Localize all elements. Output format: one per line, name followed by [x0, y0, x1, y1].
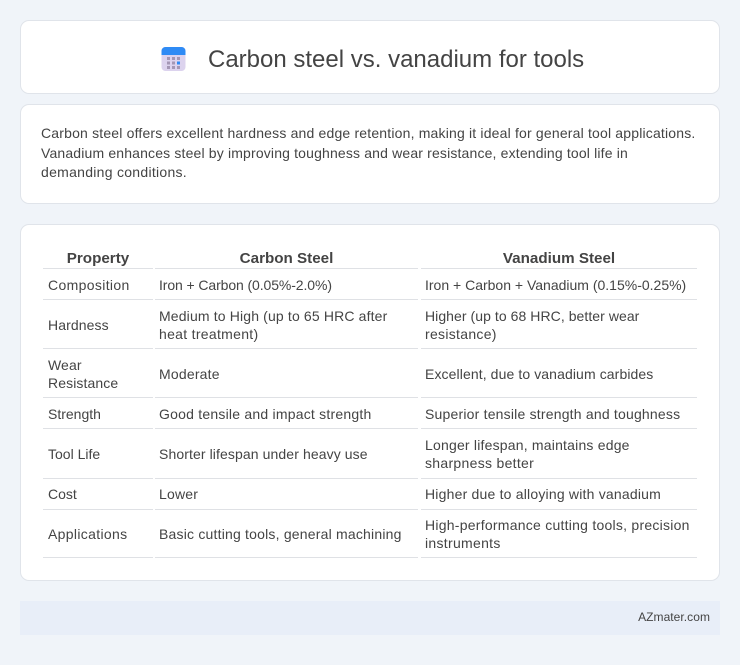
row: cost: Cost: [48, 486, 77, 502]
table header: Property: [67, 250, 129, 267]
summary paragraph: Vanadium enhances steel by improving toughness and wear resistance, extending tool life in: [41, 145, 628, 161]
row: hardness: Hardness: [48, 317, 109, 333]
row: wear resistance: Moderate: [159, 366, 220, 382]
row: cost: Higher due to alloying with vanadium: [425, 486, 661, 502]
row: tool life: Longer lifespan, maintains edge: [425, 437, 630, 453]
row: strength: Strength: [48, 406, 101, 422]
row: composition: Composition: [48, 277, 130, 293]
row: hardness: Medium to High (up to 65 HRC after: [159, 308, 387, 324]
row: strength: Good tensile and impact strength: [159, 406, 372, 422]
panel: title card: [20, 20, 720, 94]
row: wear resistance: Resistance: [48, 375, 118, 391]
summary paragraph: Carbon steel offers excellent hardness and edge retention, making it ideal for general tool applications.: [41, 125, 695, 141]
row: hardness: [48, 308, 640, 342]
row: cost: Lower: [159, 486, 198, 502]
title: Carbon steel vs. vanadium for tools: [208, 46, 584, 73]
row: applications: Applications: [48, 526, 127, 542]
footer credit: AZmater.com: [638, 610, 710, 624]
panel: comparison table: [20, 224, 720, 581]
icon: calendar: [162, 47, 186, 71]
summary paragraph: [41, 125, 695, 180]
row: applications: [48, 517, 690, 551]
row: tool life: [48, 437, 630, 471]
row: composition: Iron + Carbon + Vanadium (0.15%-0.25%): [425, 277, 686, 293]
summary paragraph: demanding conditions.: [41, 164, 187, 180]
row: applications: Basic cutting tools, general machining: [159, 526, 402, 542]
row: wear resistance: Excellent, due to vanadium carbides: [425, 366, 653, 382]
table header: Vanadium Steel: [503, 250, 615, 267]
row: applications: instruments: [425, 535, 501, 551]
row: hardness: Higher (up to 68 HRC, better wear: [425, 308, 639, 324]
row: tool life: sharpness better: [425, 455, 534, 471]
row: composition: [48, 277, 686, 293]
row: composition: Iron + Carbon (0.05%-2.0%): [159, 277, 332, 293]
row: strength: [48, 406, 680, 422]
row: tool life: Shorter lifespan under heavy use: [159, 446, 368, 462]
row: cost: [48, 486, 661, 502]
row: applications: High-performance cutting tools, precision: [425, 517, 690, 533]
row: tool life: Tool Life: [48, 446, 100, 462]
row: hardness: heat treatment): [159, 326, 258, 342]
row: wear resistance: [48, 357, 653, 391]
row: hardness: resistance): [425, 326, 497, 342]
table header: [67, 250, 615, 267]
table header: Carbon Steel: [240, 250, 333, 267]
panel: summary text: [20, 104, 720, 204]
row: wear resistance: Wear: [48, 357, 82, 373]
footer bar: [20, 601, 720, 635]
row: strength: Superior tensile strength and toughness: [425, 406, 680, 422]
